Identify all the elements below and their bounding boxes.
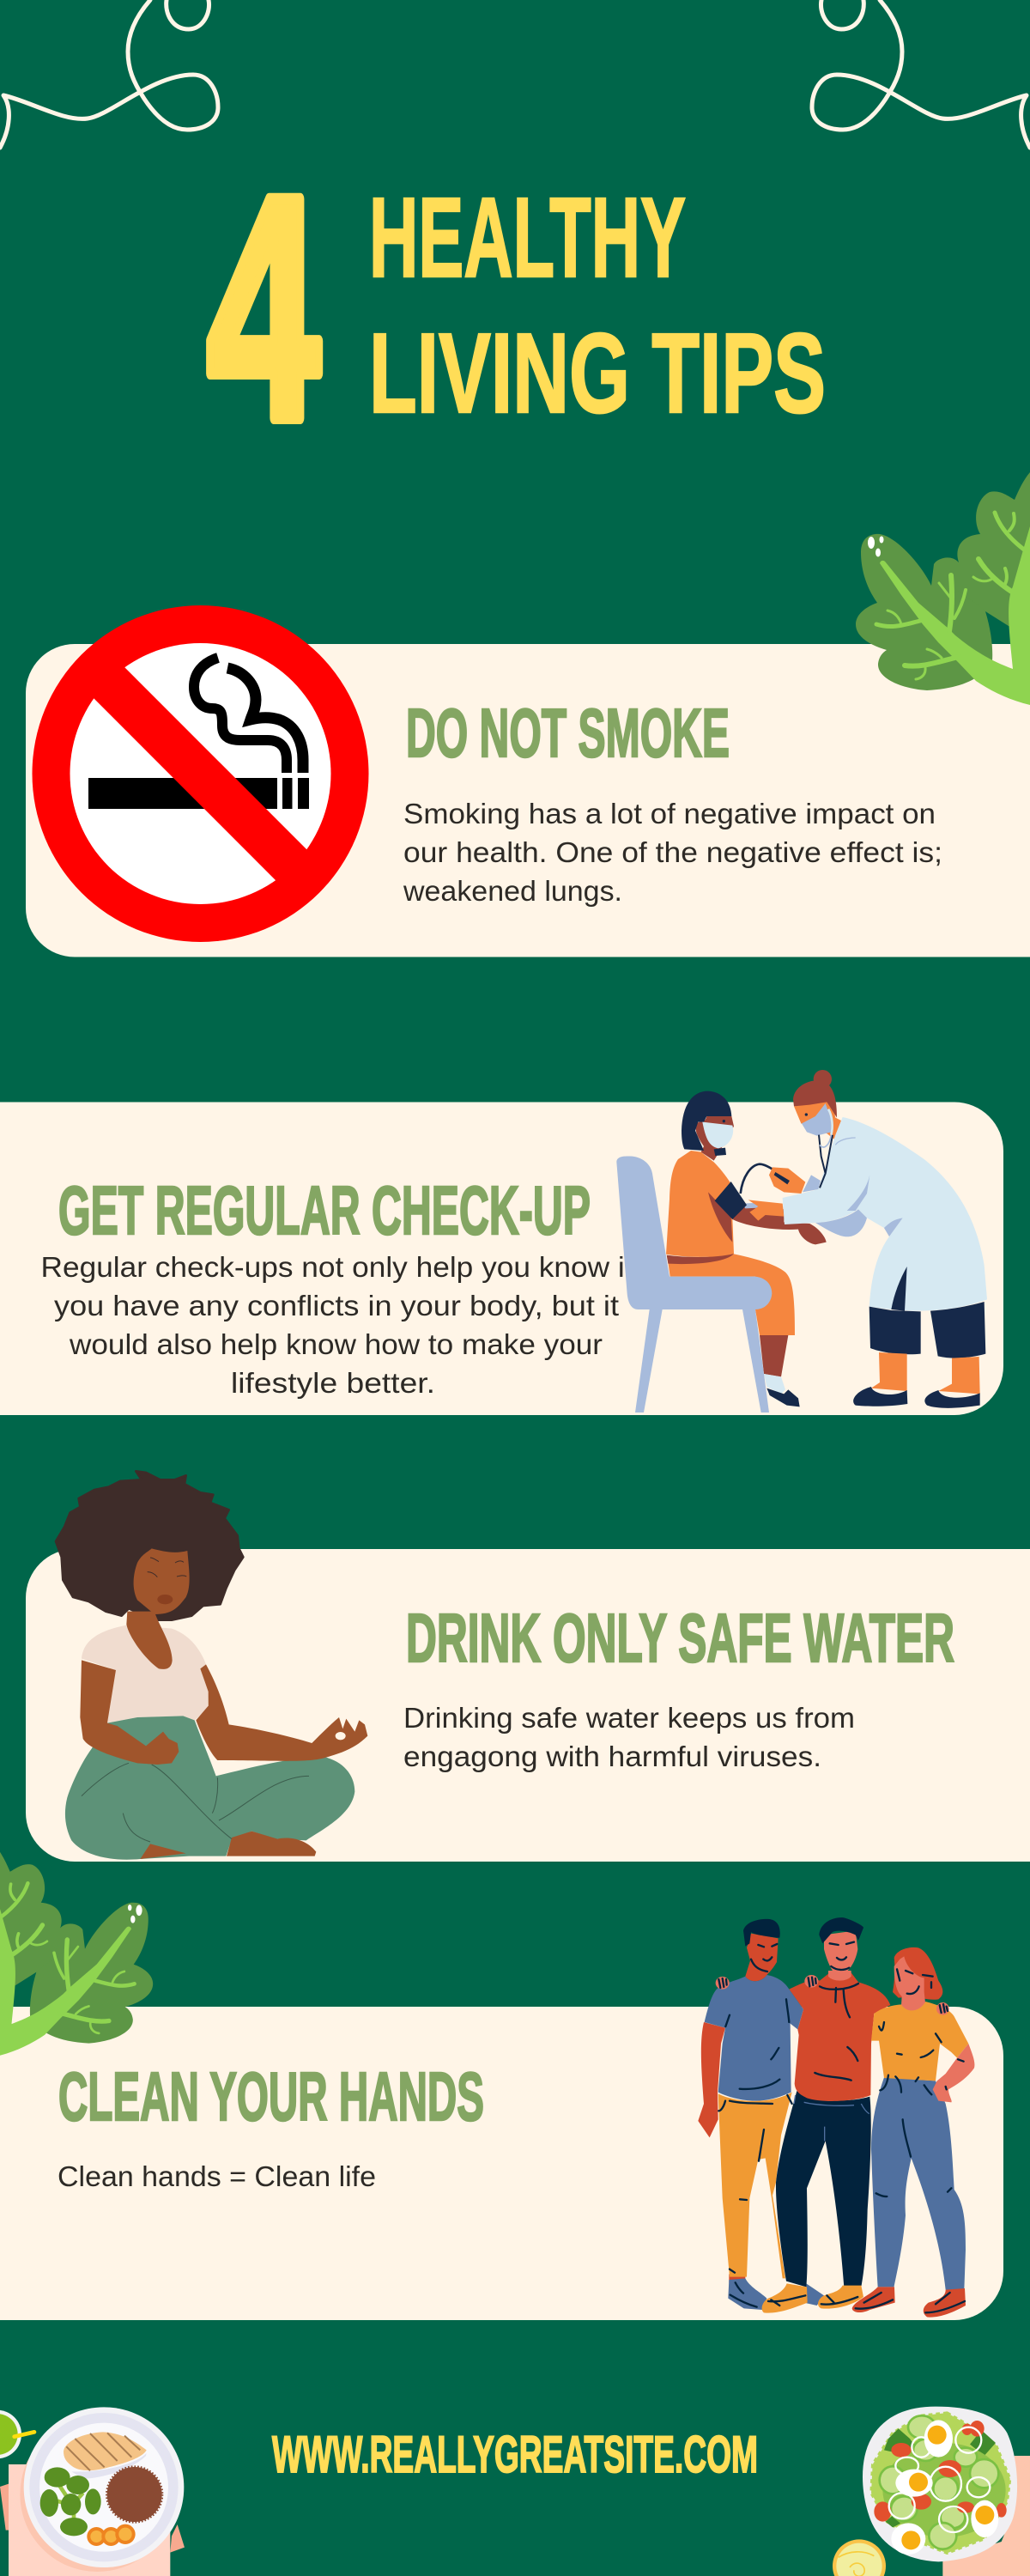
body text: [41, 1251, 633, 1399]
icon: no smoking sign: [33, 605, 369, 942]
title number 4: 4: [207, 130, 321, 486]
panel: get regular check-up: [0, 1070, 1003, 1415]
illustration: meditating woman: [56, 1471, 367, 1860]
body text: you have any conflicts in your body, but it: [54, 1290, 619, 1321]
body text: lifestyle better.: [231, 1367, 435, 1399]
body text: our health. One of the negative effect is;: [403, 836, 942, 868]
body text: Drinking safe water keeps us from: [403, 1702, 855, 1734]
body text: would also help know how to make your: [69, 1328, 603, 1360]
heading: GET REGULAR CHECK-UP: [58, 1172, 591, 1249]
heading: DO NOT SMOKE: [406, 695, 730, 771]
decoration: leaves top right: [856, 472, 1030, 705]
card background: [0, 1103, 1003, 1415]
body text: Clean hands = Clean life: [58, 2160, 376, 2192]
decoration: top-left swirl: [0, 0, 218, 148]
illustration: left plate: [0, 2407, 185, 2576]
panel: do not smoke: [26, 605, 1030, 957]
body text: engagong with harmful viruses.: [403, 1741, 821, 1772]
card background: [26, 1549, 1030, 1862]
heading: CLEAN YOUR HANDS: [58, 2058, 484, 2135]
decoration: top-right swirl: [812, 0, 1030, 148]
body text: [403, 798, 942, 907]
illustration: doctor and patient: [616, 1070, 987, 1413]
card background: [0, 2007, 1003, 2320]
body text: Smoking has a lot of negative impact on: [403, 798, 936, 829]
title: [207, 130, 826, 486]
title line 1: HEALTHY: [369, 174, 686, 301]
body text: [403, 1702, 855, 1772]
illustration: three friends: [698, 1917, 974, 2318]
body text: weakened lungs.: [403, 875, 622, 907]
decoration: leaves on panel four: [0, 1847, 153, 2057]
body text: Regular check-ups not only help you know if: [41, 1251, 633, 1283]
panel: clean your hands: [0, 1917, 1003, 2320]
illustration: right salad plate: [833, 2407, 1030, 2576]
panel: drink only safe water: [26, 1471, 1030, 1862]
title line 2: LIVING TIPS: [369, 310, 826, 436]
card background: [26, 644, 1030, 957]
